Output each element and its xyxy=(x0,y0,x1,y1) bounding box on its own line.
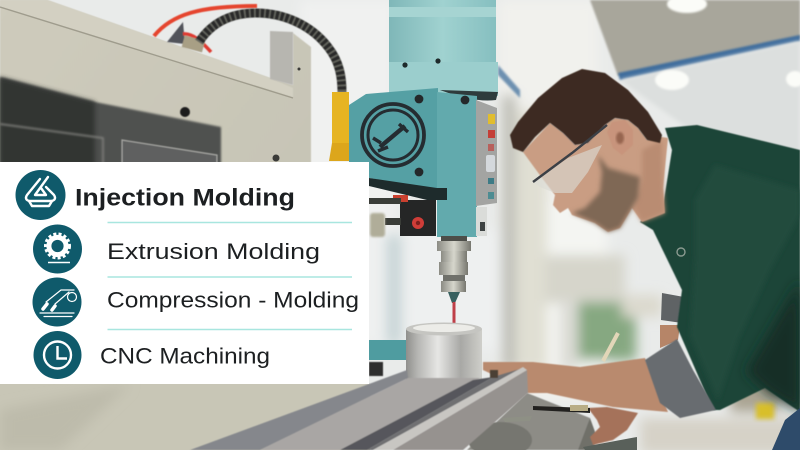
neck and face xyxy=(523,118,668,232)
label: Extrusion Molding: Extrusion Molding xyxy=(107,239,320,264)
steel rails xyxy=(190,362,528,450)
ear xyxy=(607,120,633,155)
head casting xyxy=(349,88,438,190)
safety glasses xyxy=(533,125,607,193)
torso shirt xyxy=(640,125,800,412)
far arm and sleeve xyxy=(660,293,684,348)
hair xyxy=(510,69,662,152)
label: CNC Machining: CNC Machining xyxy=(100,344,270,368)
left machine cabinet xyxy=(0,0,370,450)
icon: injection molding xyxy=(16,170,66,220)
sleeve shading xyxy=(690,165,800,400)
spindle xyxy=(437,236,471,324)
teal machine head xyxy=(349,0,498,324)
clamp hardware xyxy=(369,178,447,237)
panel: process list card xyxy=(0,162,369,384)
label: Compression - Molding: Compression - Molding xyxy=(107,288,359,313)
shirt logo xyxy=(677,248,685,256)
icon: compression tools xyxy=(32,278,82,326)
lower shirt shadow xyxy=(746,280,800,412)
rolled cuff xyxy=(645,339,716,418)
logo ring xyxy=(362,104,424,166)
control panel xyxy=(476,100,497,236)
hand on table xyxy=(588,407,638,445)
black coiled cable xyxy=(199,13,342,92)
beard xyxy=(572,155,640,232)
worktable xyxy=(467,393,598,450)
forearm xyxy=(483,358,668,412)
red hose xyxy=(154,6,257,36)
neck shade xyxy=(634,140,665,222)
icon: clock xyxy=(34,331,82,379)
cylinder column xyxy=(389,0,498,101)
table edge xyxy=(583,437,637,450)
heading: Injection Molding: Injection Molding xyxy=(75,184,295,212)
icon: gear xyxy=(33,224,82,274)
yellow connector xyxy=(329,92,350,161)
steel cylinder workpiece xyxy=(369,322,482,381)
tools on table xyxy=(502,405,590,422)
hose connector xyxy=(167,22,211,52)
jeans xyxy=(772,408,800,450)
worker xyxy=(502,69,800,450)
